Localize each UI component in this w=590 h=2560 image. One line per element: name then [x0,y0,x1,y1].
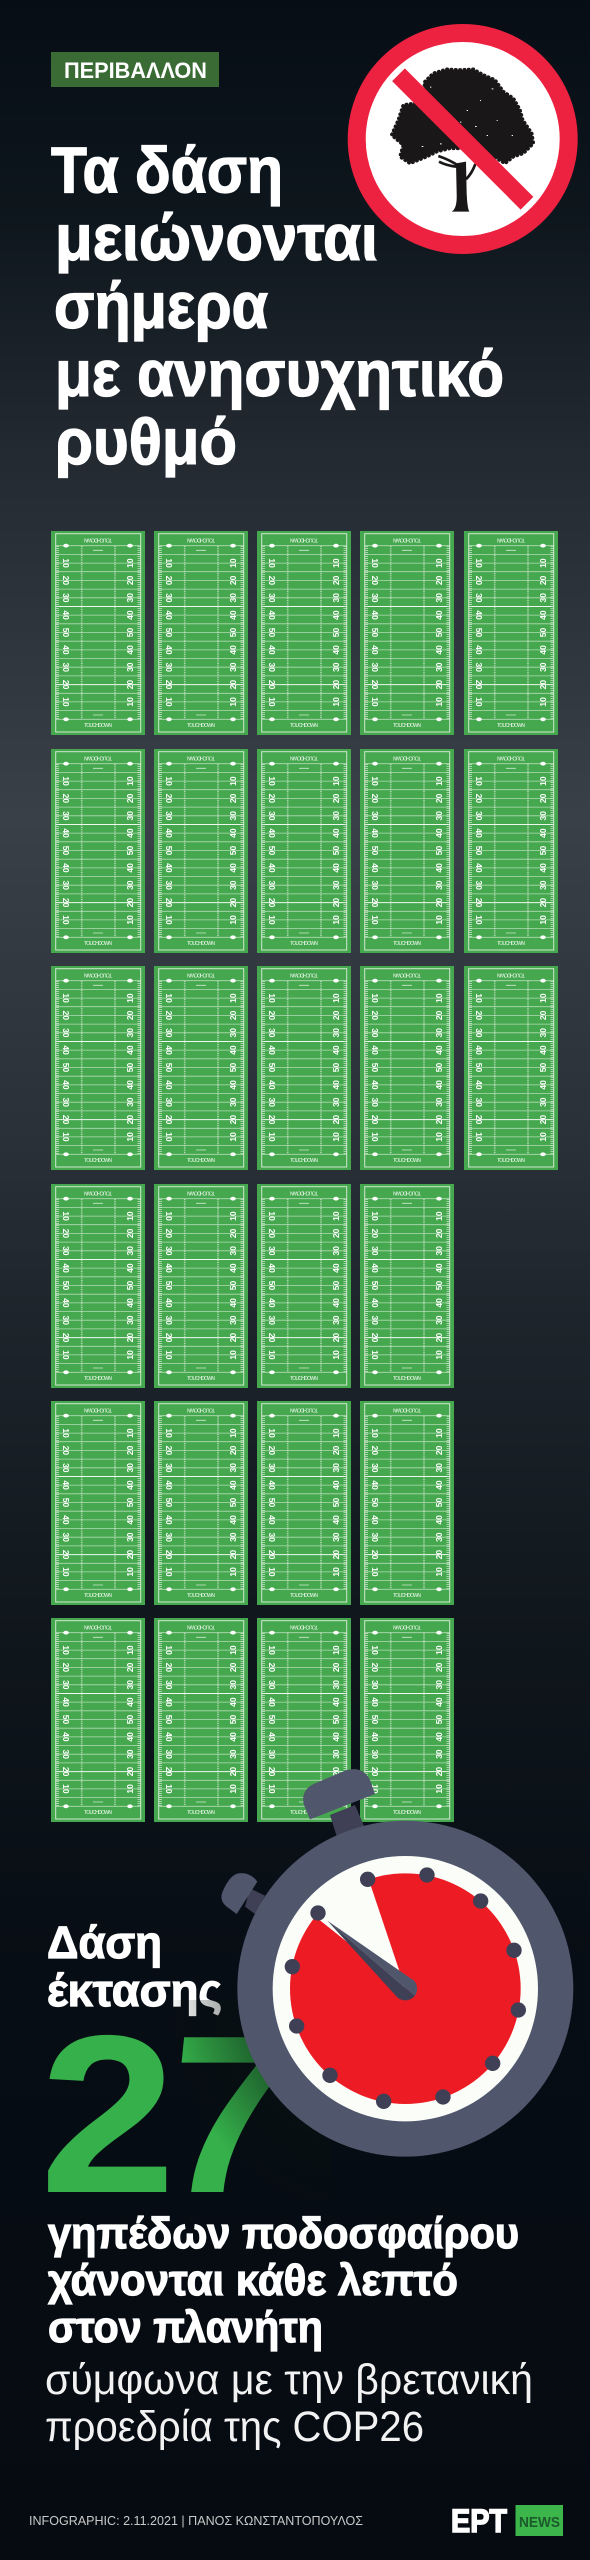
pitch 5 [464,531,558,735]
title [51,134,504,478]
pitch 26 [257,1618,351,1822]
title: μειώνονται [55,201,378,274]
title: με ανησυχητικό [55,337,504,410]
pitch 3 [257,531,351,735]
pitch 20 [51,1401,145,1605]
big number 27 [40,1988,304,2240]
pitch 17 [154,1184,248,1388]
pitch 11 [51,966,145,1170]
pitch 8 [257,749,351,953]
category tag: ΠΕΡΙΒΑΛΛΟΝ [64,58,207,83]
category tag [51,52,219,87]
pitch 4 [360,531,454,735]
logo: ERT news: ΕΡΤ [451,2503,507,2539]
main statement: χάνονται κάθε λεπτό [48,2256,458,2305]
credits: INFOGRAPHIC: 2.11.2021 | ΠΑΝΟΣ ΚΩΝΣΤΑΝΤΟΠΟΥΛΟΣ [29,2513,363,2528]
pitch 9 [360,749,454,953]
pitch 7 [154,749,248,953]
pitch 6 [51,749,145,953]
lead-in heading: έκτασης [47,1965,222,2016]
pitch 13 [257,966,351,1170]
source statement: προεδρία της COP26 [45,2403,424,2451]
clock hand [327,1921,417,2000]
pitch 18 [257,1184,351,1388]
pitch 23 [360,1401,454,1605]
pitch 12 [154,966,248,1170]
pitch 2 [154,531,248,735]
pitch 22 [257,1401,351,1605]
lead-in heading [47,1917,222,2016]
icon: tree silhouette [392,69,533,212]
pitch 27 [360,1618,454,1822]
pitch 16 [51,1184,145,1388]
main statement: γηπέδων ποδοσφαίρου [48,2209,519,2258]
pitch 10 [464,749,558,953]
title: σήμερα [54,269,268,342]
pitch 25 [154,1618,248,1822]
title: ρυθμό [55,405,237,478]
minute markers [285,1867,526,2109]
pitch 14 [360,966,454,1170]
red elapsed time sector [290,1873,521,2104]
icon: no-tree prohibition sign [357,33,569,245]
remaining white wedge [313,1878,405,1989]
big number 27: 7 [154,1989,304,2240]
main statement: στον πλανήτη [48,2303,323,2352]
pitch 1 [51,531,145,735]
icon: stopwatch [221,1769,573,2157]
prohibition slash [398,75,527,203]
side button [221,1873,265,1914]
football fields grid: 27 pitches [51,531,558,1822]
pitch 21 [154,1401,248,1605]
pitch 15 [464,966,558,1170]
watch face [273,1856,538,2121]
source statement: σύμφωνα με την βρετανική [45,2356,533,2404]
watch body [237,1821,573,2157]
title: Τα δάση [51,134,283,207]
source statement [45,2356,533,2451]
lead-in heading: Δάση [47,1917,162,1968]
logo: ERT news: NEWS [519,2514,560,2531]
pitch 19 [360,1184,454,1388]
top button [303,1769,375,1836]
pitch 24 [51,1618,145,1822]
stopwatch shadow [170,2000,330,2200]
big number 27: 2 [40,1988,176,2240]
logo: ERT news [451,2503,563,2539]
main statement [48,2209,519,2352]
